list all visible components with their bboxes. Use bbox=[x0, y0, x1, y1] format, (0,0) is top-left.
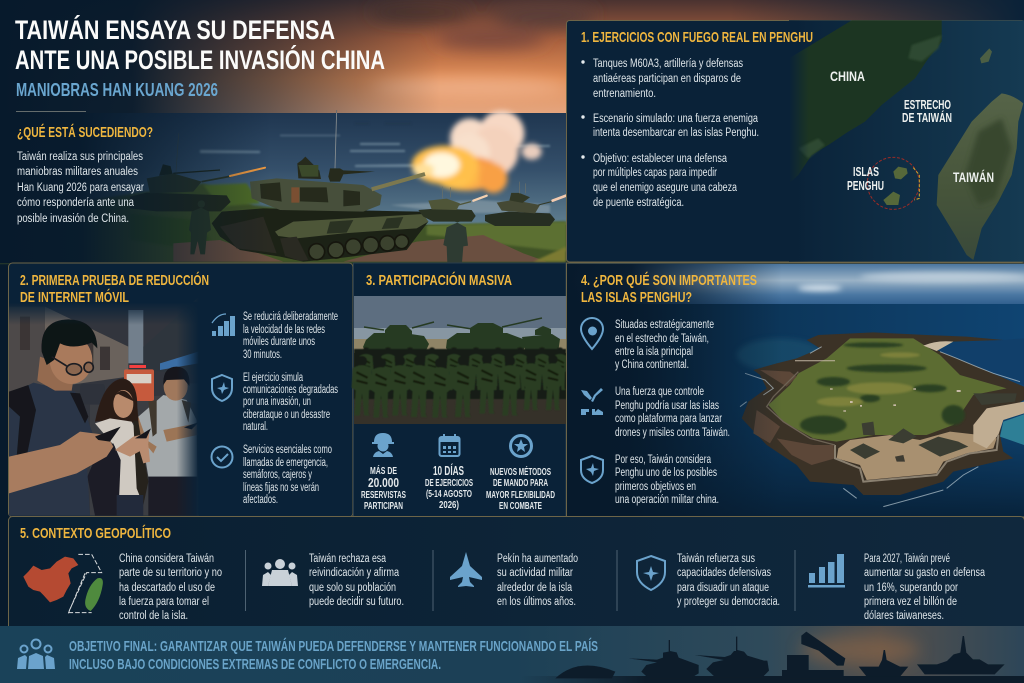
tanks bbox=[363, 318, 560, 356]
text: first targets: primeros objetivos en bbox=[615, 481, 696, 493]
text: China claim: control de la isla. bbox=[119, 610, 188, 622]
map labels: DE TAIWÁN bbox=[902, 110, 952, 125]
bullets: Escenario simulado: una fuerza enemiga bbox=[593, 113, 758, 125]
icon: community bbox=[17, 640, 55, 669]
text: simulation bbox=[243, 372, 338, 433]
heading: 1. EJERCICIOS CON FUEGO REAL EN PENGHU bbox=[581, 29, 813, 46]
left photo fade bbox=[567, 264, 782, 516]
text: platform: Una fuerza que controle bbox=[615, 386, 704, 398]
tank: right background 1 bbox=[418, 187, 487, 222]
soldier left bbox=[189, 200, 211, 254]
text: Taiwan rejects: puede decidir su futuro. bbox=[309, 596, 404, 608]
text: defense budget bbox=[864, 553, 985, 622]
text: simulation: El ejercicio simula bbox=[243, 372, 303, 384]
panel 1: ejercicios con fuego real bbox=[566, 20, 1024, 262]
stat: 10 días bbox=[425, 463, 473, 511]
stat: mando: EN COMBATE bbox=[499, 500, 542, 512]
icon: check bbox=[212, 446, 232, 468]
bullets: antiaéreas participan en disparos de bbox=[593, 73, 741, 85]
stat: reservistas: RESERVISTAS bbox=[361, 489, 406, 501]
text: speed: Se reducirá deliberadamente bbox=[243, 311, 338, 323]
heading: 4. ¿POR QUÉ SON IMPORTANTES bbox=[581, 272, 757, 289]
text: Taiwan rejects: que solo su población bbox=[309, 582, 396, 594]
text: services: llamadas de emergencia, bbox=[243, 457, 328, 469]
map labels: CHINA bbox=[830, 69, 865, 84]
text: location: entre la isla principal bbox=[615, 346, 693, 358]
text: Taiwan rejects bbox=[309, 553, 404, 608]
stat: mando bbox=[486, 465, 555, 512]
icon: drones and missiles bbox=[581, 388, 603, 415]
text: China claim bbox=[119, 553, 222, 622]
text: platform: drones y misiles contra Taiwán. bbox=[615, 427, 730, 439]
tank: left background bbox=[130, 133, 265, 211]
footer banner bbox=[0, 626, 1024, 683]
hero photo: tanks firing at sunset bbox=[0, 0, 1024, 263]
text: first targets bbox=[615, 454, 719, 506]
bullets: entrenamiento. bbox=[593, 88, 656, 100]
text: location bbox=[615, 319, 714, 371]
closing message bbox=[69, 638, 598, 673]
text: location: y China continental. bbox=[615, 359, 689, 371]
icon: location pin bbox=[581, 318, 603, 349]
bullets: intenta desembarcar en las islas Penghu. bbox=[593, 127, 759, 139]
stat: 10 días: 10 DÍAS bbox=[433, 463, 464, 478]
icon: calendar bbox=[440, 434, 460, 456]
text: first targets: una operación militar china. bbox=[615, 494, 719, 506]
heading bbox=[581, 272, 757, 306]
icon: shield plus bbox=[637, 556, 665, 590]
photo: people on phones bbox=[9, 297, 199, 516]
text: services: afectados. bbox=[243, 494, 278, 506]
icon: signal bars bbox=[212, 314, 235, 336]
text: services bbox=[243, 444, 332, 506]
stat: reservistas: MÁS DE bbox=[370, 464, 397, 477]
icon: shield bbox=[212, 375, 232, 401]
text: defense budget: primera vez el billón de bbox=[864, 596, 957, 608]
muzzle blast bbox=[412, 111, 542, 193]
text: simulation: comunicaciones degradadas bbox=[243, 384, 338, 396]
text: China claim: parte de su territorio y no bbox=[119, 567, 222, 579]
man left bbox=[9, 319, 121, 516]
heading: 2. PRIMERA PRUEBA DE REDUCCIÓN bbox=[20, 271, 209, 289]
text: services: líneas fijas no se verán bbox=[243, 482, 319, 494]
panel 5: contexto geopolítico bbox=[8, 516, 1024, 632]
text: Beijing activity: su actividad militar bbox=[497, 567, 573, 579]
icon: bar chart bbox=[808, 554, 845, 588]
photo: Penghu aerial bbox=[567, 264, 1024, 516]
intro text bbox=[17, 151, 144, 225]
bullets bbox=[581, 58, 759, 209]
text: defense budget: dólares taiwaneses. bbox=[864, 610, 944, 622]
title: ANTE UNA POSIBLE INVASIÓN CHINA bbox=[15, 44, 385, 75]
soldiers bbox=[352, 347, 568, 418]
intro text: Taiwán realiza sus principales bbox=[17, 151, 143, 163]
title bbox=[15, 14, 385, 75]
icon: shield with plane bbox=[581, 456, 603, 483]
text: Taiwan strengthens: Taiwán refuerza sus bbox=[677, 553, 755, 565]
stat: 10 días: DE EJERCICIOS bbox=[425, 477, 473, 489]
text: location: en el estrecho de Taiwán, bbox=[615, 333, 709, 345]
text: simulation: por una invasión, un bbox=[243, 396, 311, 408]
subtitle: MANIOBRAS HAN KUANG 2026 bbox=[16, 80, 218, 100]
intro text: posible invasión de China. bbox=[17, 213, 129, 225]
text: services: Servicios esenciales como bbox=[243, 444, 332, 456]
text: defense budget: Para 2027, Taiwán prevé bbox=[864, 553, 950, 565]
heading: 5. CONTEXTO GEOPOLÍTICO bbox=[20, 525, 171, 542]
text: defense budget: un 16%, superando por bbox=[864, 582, 958, 594]
text: Beijing activity: en los últimos años. bbox=[497, 596, 576, 608]
intro text: cómo respondería ante una bbox=[17, 197, 134, 209]
stat: 10 días: 2026) bbox=[439, 499, 459, 511]
text: simulation: natural. bbox=[243, 421, 268, 433]
text: China claim: la fuerza para tomar el bbox=[119, 596, 209, 608]
text: location: Situadas estratégicamente bbox=[615, 319, 714, 331]
tank: main foreground bbox=[212, 110, 428, 262]
map labels: ISLAS bbox=[853, 165, 879, 179]
text: platform: Penghu podría usar las islas bbox=[615, 400, 719, 412]
stat: reservistas bbox=[361, 464, 406, 512]
text: Taiwan strengthens bbox=[677, 553, 780, 608]
text: platform bbox=[615, 386, 730, 439]
sea fade bbox=[0, 113, 270, 263]
heading: LAS ISLAS PENGHU? bbox=[581, 289, 692, 306]
bullets: Tanques M60A3, artillería y defensas bbox=[593, 58, 743, 70]
heading bbox=[20, 271, 209, 306]
text: simulation: ciberataque o un desastre bbox=[243, 409, 330, 421]
text: Taiwan rejects: reivindicación y afirma bbox=[309, 567, 399, 579]
soldier right bbox=[443, 214, 468, 263]
intro text: Han Kuang 2026 para ensayar bbox=[17, 182, 144, 194]
text: Taiwan strengthens: y proteger su democracia. bbox=[677, 596, 780, 608]
bullets: por múltiples capas para impedir bbox=[593, 167, 717, 179]
text: Beijing activity bbox=[497, 553, 578, 608]
map labels: TAIWÁN bbox=[953, 170, 994, 185]
man right bbox=[137, 367, 199, 516]
panel 2: reducción de internet móvil bbox=[8, 263, 353, 517]
map: strait of Taiwan bbox=[789, 20, 1024, 262]
title: TAIWÁN ENSAYA SU DEFENSA bbox=[15, 14, 335, 45]
stat: reservistas: PARTICIPAN bbox=[364, 500, 403, 512]
text: Taiwan strengthens: para disuadir un ataque bbox=[677, 582, 769, 594]
icon: people bbox=[262, 559, 298, 586]
text: speed: 30 minutos. bbox=[243, 349, 282, 361]
stat: 10 días: (5-14 AGOSTO bbox=[426, 488, 472, 500]
sky fade bbox=[0, 0, 440, 113]
map labels: ESTRECHO bbox=[904, 98, 951, 112]
icon: China and Taiwan map bbox=[23, 554, 103, 613]
closing message: INCLUSO BAJO CONDICIONES EXTREMAS DE CONFLICTO O EMERGENCIA. bbox=[69, 656, 441, 673]
text: platform: como plataforma para lanzar bbox=[615, 413, 722, 425]
map labels: PENGHU bbox=[847, 179, 884, 193]
stat: mando: DE MANDO PARA bbox=[493, 477, 548, 489]
stat: mando: MAYOR FLEXIBILIDAD bbox=[486, 489, 555, 501]
heading: qué está sucediendo: ¿QUÉ ESTÁ SUCEDIENDO? bbox=[17, 124, 153, 141]
photo: troops and tanks bbox=[352, 296, 568, 424]
closing message: OBJETIVO FINAL: GARANTIZAR QUE TAIWÁN PUEDA DEFENDERSE Y MANTENER FUNCIONANDO EL PAÍS bbox=[69, 638, 598, 655]
text: Beijing activity: alrededor de la isla bbox=[497, 582, 572, 594]
text: speed bbox=[243, 311, 338, 361]
text: speed: móviles durante unos bbox=[243, 336, 315, 348]
text: first targets: Penghu uno de los posibles bbox=[615, 467, 717, 479]
text: Taiwan rejects: Taiwán rechaza esa bbox=[309, 553, 386, 565]
heading: 3. PARTICIPACIÓN MASIVA bbox=[366, 271, 512, 289]
panel 3: participación masiva bbox=[352, 263, 568, 517]
woman bbox=[87, 379, 151, 516]
silhouettes: military vehicles bbox=[555, 632, 1005, 678]
icon: star badge bbox=[510, 436, 532, 456]
icon: fighter jet bbox=[450, 552, 482, 587]
stat: mando: NUEVOS MÉTODOS bbox=[490, 465, 551, 478]
heading: DE INTERNET MÓVIL bbox=[20, 288, 129, 306]
bullets: Objetivo: establecer una defensa bbox=[593, 153, 727, 165]
text: China claim: China considera Taiwán bbox=[119, 553, 214, 565]
stat: reservistas: 20.000 bbox=[368, 475, 399, 490]
panel 4: por qué Penghu bbox=[566, 263, 1024, 517]
map labels bbox=[830, 69, 994, 193]
tank: right background 2 bbox=[485, 182, 566, 226]
text: speed: la velocidad de las redes bbox=[243, 324, 325, 336]
icon: helmet reservist bbox=[372, 433, 394, 457]
text: services: semáforos, cajeros y bbox=[243, 469, 312, 481]
text: first targets: Por eso, Taiwán considera bbox=[615, 454, 711, 466]
text: Taiwan strengthens: capacidades defensivas bbox=[677, 567, 771, 579]
bullets: que el enemigo asegure una cabeza bbox=[593, 182, 737, 194]
bullets: de puente estratégica. bbox=[593, 197, 684, 209]
text: China claim: ha descartado el uso de bbox=[119, 582, 215, 594]
text: defense budget: aumentar su gasto en defensa bbox=[864, 567, 985, 579]
text: Beijing activity: Pekín ha aumentado bbox=[497, 553, 578, 565]
intro text: maniobras militares anuales bbox=[17, 166, 138, 178]
